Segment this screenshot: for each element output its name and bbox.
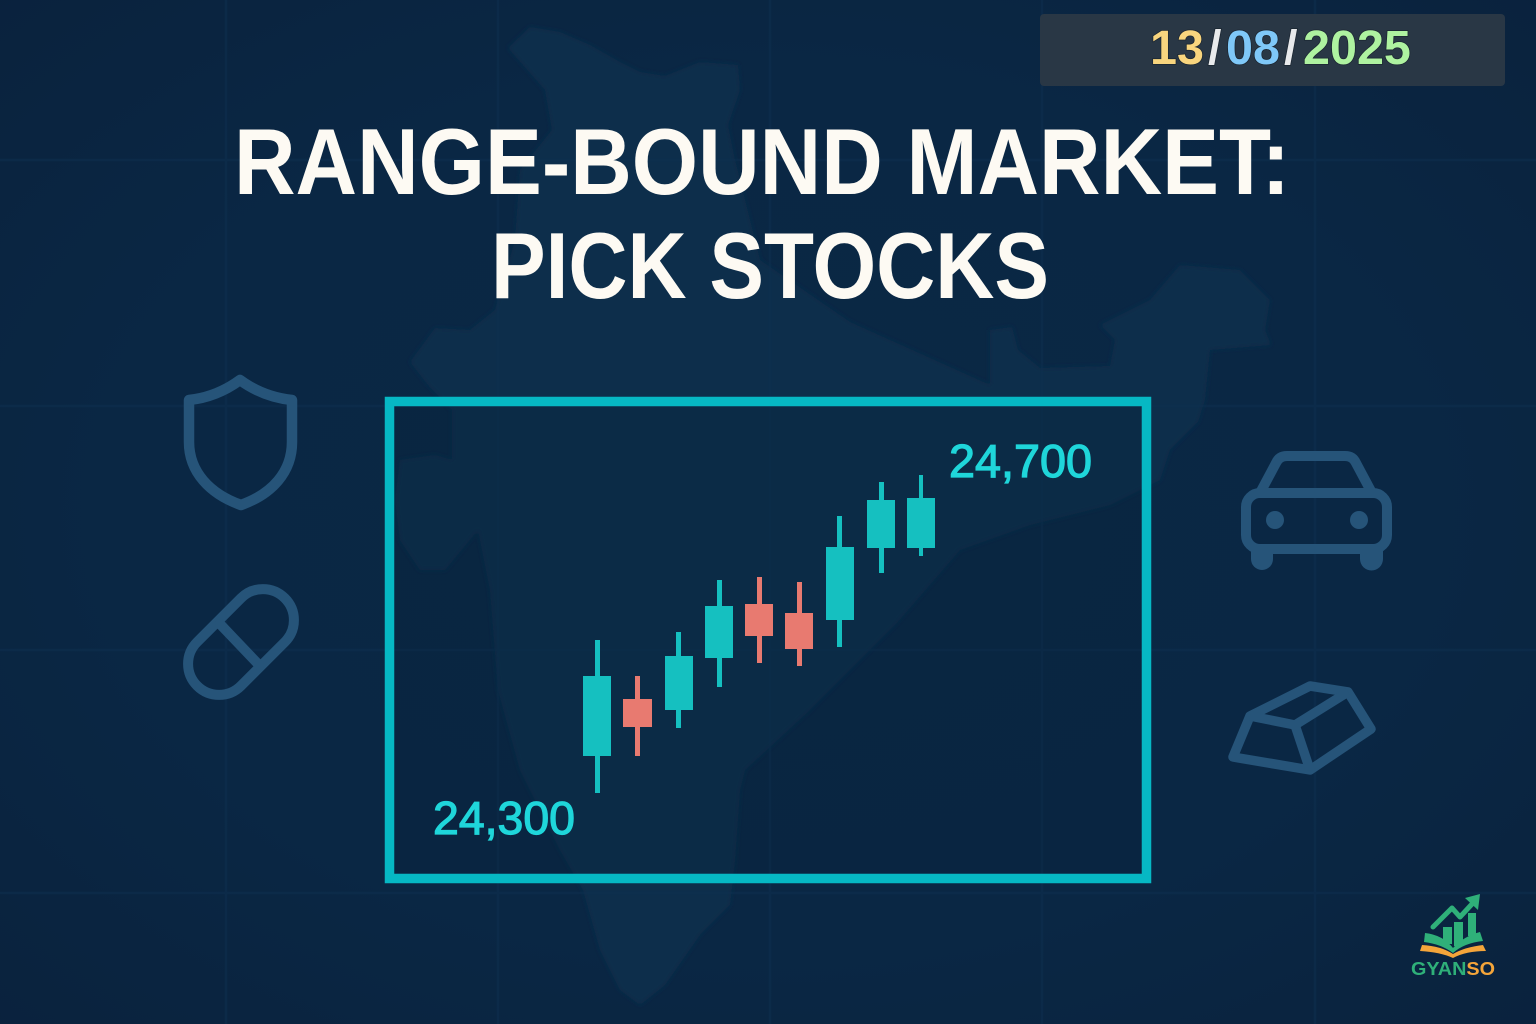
date text bbox=[1150, 21, 1411, 75]
logo book bbox=[1424, 932, 1483, 953]
date text: 08 bbox=[1226, 21, 1280, 75]
title: PICK STOCKS bbox=[491, 213, 1049, 318]
candlestick chart bbox=[583, 475, 935, 793]
date text: 13 bbox=[1150, 21, 1204, 75]
icon: car bbox=[1246, 456, 1387, 570]
background map of India bbox=[395, 27, 1271, 1005]
logo wordmark: GYAN SO bbox=[1411, 959, 1495, 979]
title bbox=[234, 109, 1290, 318]
icon: shield bbox=[189, 380, 292, 505]
label: 24,700: 24,700 bbox=[949, 435, 1092, 487]
logo: Gyanso bbox=[1411, 894, 1495, 979]
date text: / bbox=[1284, 21, 1297, 75]
date text: 2025 bbox=[1303, 21, 1411, 75]
label: 24,300: 24,300 bbox=[433, 792, 575, 844]
chart frame bbox=[390, 402, 1146, 878]
date text: / bbox=[1208, 21, 1221, 75]
logo bars bbox=[1443, 913, 1476, 946]
logo arrow bbox=[1433, 894, 1480, 927]
date badge bbox=[1040, 14, 1505, 86]
icon: pill bbox=[175, 576, 307, 708]
title: RANGE-BOUND MARKET: bbox=[234, 109, 1290, 214]
icon: gold bar bbox=[1233, 686, 1371, 770]
